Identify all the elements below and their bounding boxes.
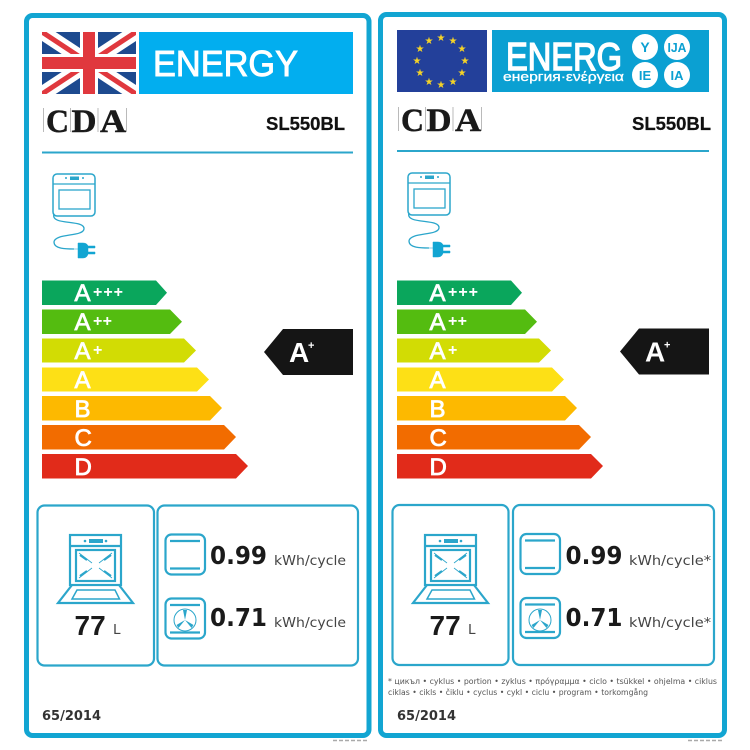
conventional consumption: 0.99 (210, 541, 267, 570)
icon: UK flag (42, 32, 136, 94)
banner: ENERGY: ENERGY (153, 43, 298, 84)
icon: EU flag: ★ (461, 56, 470, 67)
bar: A++: A (430, 309, 446, 336)
rating arrow: A+: + (308, 340, 314, 352)
bar: B (42, 396, 222, 423)
volume value: L (113, 622, 121, 638)
logo: CDA: A (100, 104, 126, 140)
banner: ENERGY multilingual: IJA (668, 40, 687, 55)
bar: C (42, 425, 236, 452)
logo: CDA: A (455, 103, 481, 139)
icon: oven with power plug (53, 174, 95, 258)
panel: UK energy label (26, 16, 369, 736)
bar: D (42, 454, 248, 481)
logo: CDA: C (401, 103, 424, 139)
model number: SL550BL (632, 114, 711, 134)
logo: CDA: D (72, 104, 96, 140)
rating arrow: A+: A (645, 336, 665, 368)
panel: EU energy label (380, 14, 724, 736)
bar: A+++: A (74, 280, 91, 307)
banner: ENERGY multilingual: IE (639, 68, 651, 83)
rating arrow: A+: A (289, 337, 309, 368)
logo: CDA: D (426, 103, 452, 139)
icon: EU flag: ★ (425, 36, 434, 47)
bar: A+ (397, 338, 551, 365)
bar: A+++: A (430, 280, 446, 307)
banner: ENERGY multilingual: IA (670, 68, 684, 83)
icon: conventional oven (520, 534, 560, 574)
bar: A+++: +++ (93, 284, 123, 301)
banner: ENERGY (139, 32, 353, 94)
logo: CDA (44, 104, 126, 140)
bar: A++: A (74, 309, 91, 336)
bar: A+++ (397, 280, 522, 307)
icon: EU flag: ★ (437, 33, 446, 44)
bar: B: B (74, 396, 91, 423)
volume value: L (468, 622, 476, 638)
icon: oven (413, 535, 488, 603)
icon: fan oven (166, 598, 205, 638)
icon: EU flag: ★ (413, 56, 422, 67)
bar: A+++: +++ (448, 284, 478, 301)
fan consumption: kWh/cycle (274, 615, 346, 631)
bar: A: A (74, 367, 91, 394)
bar: A+ (42, 338, 196, 365)
icon: EU flag: ★ (458, 44, 467, 55)
bar: C: C (74, 425, 92, 452)
banner: ENERGY multilingual: енергия·ενέργεια (503, 69, 625, 84)
rating arrow: A+ (620, 328, 709, 374)
fan consumption (566, 603, 711, 632)
energy scale (397, 280, 603, 481)
volume value: 77 (74, 610, 106, 641)
icon: EU flag: ★ (425, 77, 434, 88)
box: energy consumption (513, 505, 714, 665)
bar: A+: + (93, 342, 102, 359)
bar: A++: ++ (448, 313, 467, 330)
regulation number: 65/2014 (42, 709, 101, 724)
energy scale (42, 280, 248, 481)
conventional consumption: kWh/cycle (274, 553, 346, 569)
bar: D: D (74, 454, 92, 481)
rating arrow: A+: + (664, 340, 670, 352)
volume value (430, 610, 476, 641)
bar: C: C (430, 425, 447, 452)
conventional consumption (566, 541, 711, 570)
box: oven volume (38, 506, 154, 666)
fan consumption (210, 603, 346, 632)
bar: A: A (430, 367, 446, 394)
box: energy consumption (158, 506, 358, 666)
fan consumption: 0.71 (566, 603, 622, 632)
conventional consumption: kWh/cycle* (629, 553, 711, 569)
banner: ENERGY multilingual (492, 30, 709, 92)
logo: CDA: C (46, 104, 69, 140)
icon: oven with power plug (408, 173, 450, 257)
bar: D: D (430, 454, 447, 481)
icon: EU flag: ★ (416, 68, 425, 79)
bar: B: B (430, 396, 446, 423)
rating arrow: A+ (264, 329, 353, 375)
bar: A (42, 367, 209, 394)
icon: EU flag: ★ (458, 68, 467, 79)
banner: ENERGY multilingual: Y (640, 39, 650, 55)
fan consumption: kWh/cycle* (629, 615, 711, 631)
logo: CDA (398, 103, 482, 139)
icon: EU flag: ★ (437, 80, 446, 91)
icon: EU flag: ★ (449, 77, 458, 88)
icon: conventional oven (166, 534, 205, 574)
bar: A+: A (430, 338, 446, 365)
volume value: 77 (430, 610, 461, 641)
icon: EU flag (397, 30, 487, 92)
fan consumption: 0.71 (210, 603, 267, 632)
conventional consumption: 0.99 (566, 541, 622, 570)
bar: A+++ (42, 280, 167, 307)
icon: fan oven (520, 598, 560, 638)
bar: A++: ++ (93, 313, 112, 330)
bar: D (397, 454, 603, 481)
footnote: cycle translations: * цикъл • cyklus • portion • zyklus • πρόγραμμα • ciclo • tsükkel • ohjelma • ciklus (388, 676, 717, 686)
box: oven volume (392, 505, 508, 665)
conventional consumption (210, 541, 346, 570)
footnote: cycle translations (388, 676, 717, 697)
icon: EU flag: ★ (449, 36, 458, 47)
bar: A++ (42, 309, 182, 336)
regulation number: 65/2014 (397, 709, 456, 724)
volume value (74, 610, 121, 641)
bar: A (397, 367, 564, 394)
bar: C (397, 425, 591, 452)
footnote: cycle translations: ciklas • cikls • čiklu • cyclus • cykl • ciclu • program • torkomgång (388, 687, 648, 697)
bar: A++ (397, 309, 537, 336)
bar: A+: + (448, 342, 457, 359)
icon: oven (58, 535, 133, 603)
banner: ENERGY multilingual: ENERG (506, 36, 622, 79)
bar: B (397, 396, 577, 423)
bar: A+: A (74, 338, 91, 365)
model number: SL550BL (266, 114, 345, 134)
icon: EU flag: ★ (416, 44, 425, 55)
